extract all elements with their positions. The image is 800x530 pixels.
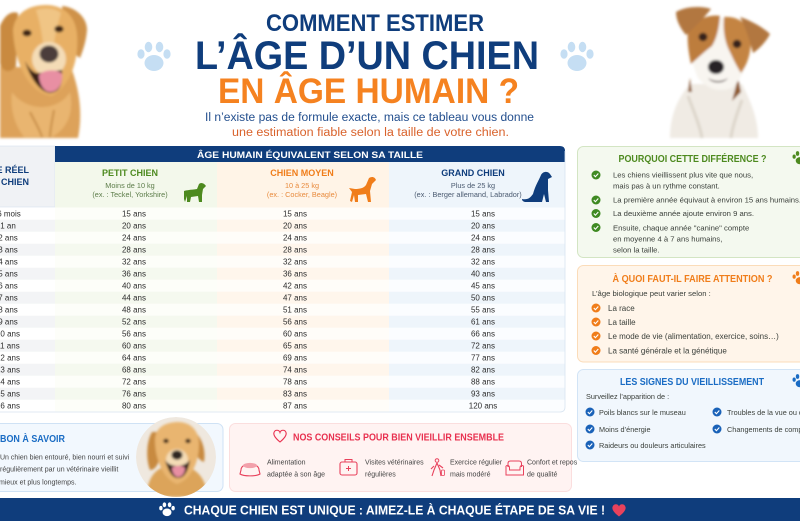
icon: green paw: [793, 151, 800, 164]
table values: 15 ans: [122, 210, 146, 218]
table values: 1 an: [0, 222, 16, 230]
tip: visites vétérinaires: Visites vétérinaires: [365, 460, 424, 466]
table values: 61 ans: [471, 318, 495, 326]
icon: left paw: [137, 42, 171, 71]
table values: 28 ans: [471, 246, 495, 254]
column header: grand chien: (ex. : Berger allemand, Labrador): [414, 190, 522, 199]
title: [195, 10, 539, 111]
table values: 32 ans: [471, 258, 495, 266]
tip: exercice: [431, 459, 503, 478]
subtitle: une estimation fiable selon la taille de votre chien.: [232, 127, 509, 139]
table values: 28 ans: [122, 246, 146, 254]
table values: 15 ans: [283, 210, 307, 218]
table values: 32 ans: [283, 258, 307, 266]
table values: 44 ans: [122, 294, 146, 302]
column header: chien moyen: [217, 162, 389, 208]
table header bar: [55, 146, 565, 162]
table values: 36 ans: [122, 270, 146, 278]
panel: nos conseils: [230, 424, 578, 492]
table values: 47 ans: [283, 294, 307, 302]
table header bar: ÂGE HUMAIN ÉQUIVALENT SELON SA TAILLE: [197, 149, 423, 161]
panel: bon à savoir: Un chien bien entouré, bien nourri et suivi: [0, 454, 130, 462]
subtitle: Il n’existe pas de formule exacte, mais ce tableau vous donne: [205, 112, 534, 124]
list item: La première année équivaut à environ 15 ans humains.: [613, 196, 800, 204]
list item: [592, 318, 636, 327]
subtitle: [205, 112, 534, 139]
column header: grand chien: Plus de 25 kg: [451, 181, 495, 190]
table row stripes: [0, 151, 565, 412]
panel: bon à savoir: [0, 417, 223, 497]
list item: [592, 223, 749, 254]
list item: Moins d’énergie: [599, 425, 651, 434]
table values: 93 ans: [471, 390, 495, 398]
tip: visites vétérinaires: [340, 460, 424, 478]
table values: 36 ans: [283, 270, 307, 278]
table values: 24 ans: [283, 234, 307, 242]
column header: chien moyen: (ex. : Cocker, Beagle): [267, 190, 337, 199]
table values: 120 ans: [469, 402, 497, 410]
column header: petit chien: (ex. : Teckel, Yorkshire): [92, 190, 168, 199]
table values: 51 ans: [283, 306, 307, 314]
table values: 42 ans: [283, 282, 307, 290]
table values: [0, 210, 497, 410]
tip: exercice: mais modéré: [450, 472, 491, 478]
tip: alimentation: [240, 460, 325, 478]
table values: 78 ans: [283, 378, 307, 386]
column: real age header: [0, 146, 55, 207]
column header: petit chien: [55, 162, 217, 208]
list item: La taille: [608, 318, 636, 327]
list item: La santé générale et la génétique: [608, 346, 727, 356]
table values: 28 ans: [283, 246, 307, 254]
table values: 56 ans: [283, 318, 307, 326]
column header: chien moyen: CHIEN MOYEN: [270, 168, 334, 178]
panel: bon à savoir: régulièrement par un vétérinaire vieillit: [0, 466, 118, 474]
photo: golden retriever: [0, 5, 87, 138]
table values: 65 ans: [283, 342, 307, 350]
list item: Ensuite, chaque année "canine" compte: [613, 224, 749, 232]
list item: Poils blancs sur le museau: [599, 408, 686, 417]
title: L’ÂGE D’UN CHIEN: [195, 32, 539, 78]
icon: white paw: [159, 502, 175, 516]
icon: heart: [274, 430, 286, 442]
list item: selon la taille.: [613, 246, 660, 254]
list item: La race: [608, 304, 635, 313]
table values: 48 ans: [122, 306, 146, 314]
column header: grand chien: GRAND CHIEN: [441, 168, 505, 178]
column header: chien moyen: 10 à 25 kg: [285, 181, 319, 190]
footer banner: [0, 498, 800, 521]
panel: pourquoi cette différence: POURQUOI CETTE DIFFÉRENCE ?: [618, 152, 766, 165]
list item: mais pas à un rythme constant.: [613, 182, 720, 190]
column header: petit chien: PETIT CHIEN: [102, 168, 158, 178]
list item: en moyenne 4 à 7 ans humains,: [613, 234, 722, 244]
panel: les signes du vieillissement: LES SIGNES DU VIEILLISSEMENT: [620, 377, 764, 388]
tip: exercice: Exercice régulier: [450, 460, 503, 466]
table values: 55 ans: [471, 306, 495, 314]
table values: 74 ans: [283, 366, 307, 374]
list item: La deuxième année ajoute environ 9 ans.: [613, 209, 754, 218]
table values: 40 ans: [122, 282, 146, 290]
intro text: L’âge biologique peut varier selon :: [592, 289, 711, 298]
heading: NOS CONSEILS POUR BIEN VIEILLIR ENSEMBLE: [293, 432, 504, 444]
panel: à quoi faut-il faire attention: [578, 266, 800, 362]
icon: blue paw: [793, 374, 800, 387]
panel: à quoi faut-il faire attention: À QUOI FAUT-IL FAIRE ATTENTION ?: [612, 272, 772, 285]
table values: 76 ans: [122, 390, 146, 398]
table values: 24 ans: [471, 234, 495, 242]
tip: confort: [506, 460, 578, 478]
list item: [592, 170, 753, 190]
table values: 69 ans: [283, 354, 307, 362]
column header: petit chien: Moins de 10 kg: [105, 181, 155, 190]
icon: red heart: [612, 504, 626, 516]
list item: Le mode de vie (alimentation, exercice, soins…): [608, 332, 779, 341]
table values: 50 ans: [471, 294, 495, 302]
icon: small dog: [184, 183, 206, 202]
table values: 20 ans: [122, 222, 146, 230]
table values: 60 ans: [122, 342, 146, 350]
table values: 24 ans: [122, 234, 146, 242]
title: COMMENT ESTIMER: [266, 10, 484, 37]
footer banner: CHAQUE CHIEN EST UNIQUE : AIMEZ-LE À CHAQUE ÉTAPE DE SA VIE !: [184, 502, 605, 518]
table values: 52 ans: [122, 318, 146, 326]
icon: orange paw: [793, 271, 800, 284]
table values: 56 ans: [122, 330, 146, 338]
table values: 66 ans: [471, 330, 495, 338]
table values: 20 ans: [283, 222, 307, 230]
panel: bon à savoir: mieux et plus longtemps.: [0, 480, 76, 486]
tip: visites vétérinaires: régulières: [365, 472, 396, 478]
icon: medium dog: [349, 177, 376, 202]
table values: 45 ans: [471, 282, 495, 290]
title: EN ÂGE HUMAIN ?: [218, 71, 519, 111]
table values: 68 ans: [122, 366, 146, 374]
table values: 80 ans: [122, 402, 146, 410]
table values: 72 ans: [471, 342, 495, 350]
table values: 60 ans: [283, 330, 307, 338]
icon: right paw: [560, 42, 594, 71]
table values: 20 ans: [471, 222, 495, 230]
panel: pourquoi cette différence: [578, 146, 800, 258]
tip: confort: Confort et repos: [527, 460, 578, 466]
list item: Les chiens vieillissent plus vite que nous,: [613, 170, 753, 180]
icon: large dog: [522, 172, 552, 202]
table values: 40 ans: [471, 270, 495, 278]
intro text: Surveillez l’apparition de :: [586, 392, 669, 401]
table values: 15 ans: [471, 210, 495, 218]
photo: jack russell: [670, 7, 770, 138]
table values: 82 ans: [471, 366, 495, 374]
table values: 64 ans: [122, 354, 146, 362]
list item: Raideurs ou douleurs articulaires: [599, 441, 706, 450]
table values: 88 ans: [471, 378, 495, 386]
age table: [0, 146, 565, 412]
table values: 83 ans: [283, 390, 307, 398]
table values: 87 ans: [283, 402, 307, 410]
table values: 32 ans: [122, 258, 146, 266]
tip: confort: de qualité: [527, 472, 557, 478]
column header: grand chien: [389, 162, 565, 208]
panel: bon à savoir: BON À SAVOIR: [0, 432, 66, 445]
table values: 77 ans: [471, 354, 495, 362]
table values: 72 ans: [122, 378, 146, 386]
tip: alimentation: Alimentation: [267, 460, 306, 466]
photo: golden retriever in a circle: [136, 417, 216, 497]
tip: alimentation: adaptée à son âge: [267, 472, 325, 478]
panel: les signes du vieillissement: [578, 370, 800, 462]
list item: [592, 304, 635, 313]
